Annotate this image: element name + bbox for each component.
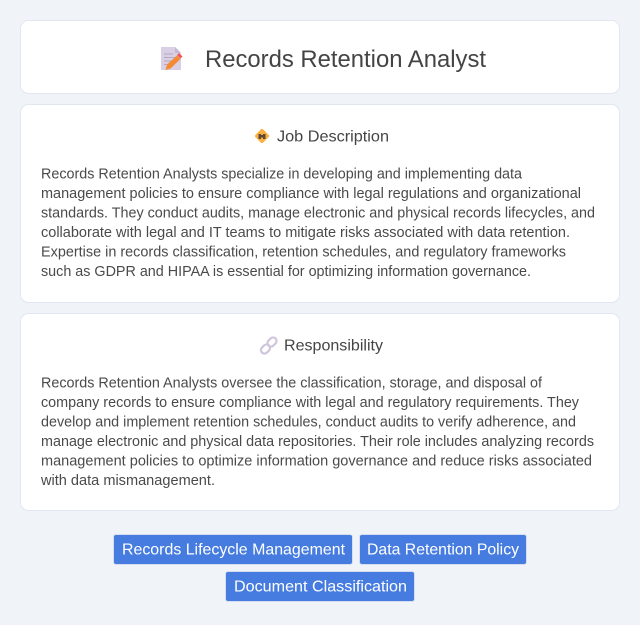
text block: responsibility: Records Retention Analysts oversee the classification, storage, and disposal of [41, 376, 543, 392]
tag: data retention policy [360, 534, 526, 564]
heading: responsibility: Responsibility [284, 338, 383, 354]
text block: job description [41, 166, 595, 280]
text block: job description: collaborate with legal and IT teams to mitigate risks associated with data retention. [41, 225, 570, 241]
text block: responsibility [40, 376, 594, 489]
text block: job description: standards. They conduct audits, manage electronic and physical records lifecycles, and [41, 206, 595, 222]
panel: title card [20, 20, 620, 94]
tag: records lifecycle management: Records Lifecycle Management [122, 542, 346, 558]
icon: chain link [259, 336, 278, 355]
panel: responsibility [20, 314, 620, 510]
text block: responsibility: company records to ensure compliance with legal and regulatory requirements. They [41, 395, 580, 411]
text block: job description: Expertise in records classification, retention schedules, and regulatory frameworks [41, 244, 566, 260]
heading: job description: Job Description [277, 128, 389, 146]
title: Records Retention Analyst [205, 46, 486, 73]
tag: document classification [226, 572, 414, 602]
tag: document classification: Document Classification [234, 578, 407, 596]
text block: responsibility: management policies to optimize information governance and reduce risks associated [41, 454, 592, 470]
text block: responsibility: develop and implement retention schedules, conduct audits to verify adherence, and [41, 414, 576, 430]
tag: data retention policy: Data Retention Policy [367, 542, 519, 558]
panel: job description [20, 104, 620, 302]
text block: job description: management policies to ensure compliance with legal regulations and organizational [41, 186, 581, 202]
text block: job description: such as GDPR and HIPAA is essential for optimizing information governance. [41, 264, 531, 280]
text block: responsibility: manage electronic and physical data repositories. Their role includes analyzing records [41, 434, 594, 450]
icon: diamond sign [254, 128, 270, 144]
tag: records lifecycle management [114, 534, 352, 564]
text block: job description: Records Retention Analysts specialize in developing and implementing data [41, 166, 522, 182]
icon: document with pencil [161, 47, 182, 70]
text block: responsibility: with data mismanagement. [40, 473, 215, 489]
